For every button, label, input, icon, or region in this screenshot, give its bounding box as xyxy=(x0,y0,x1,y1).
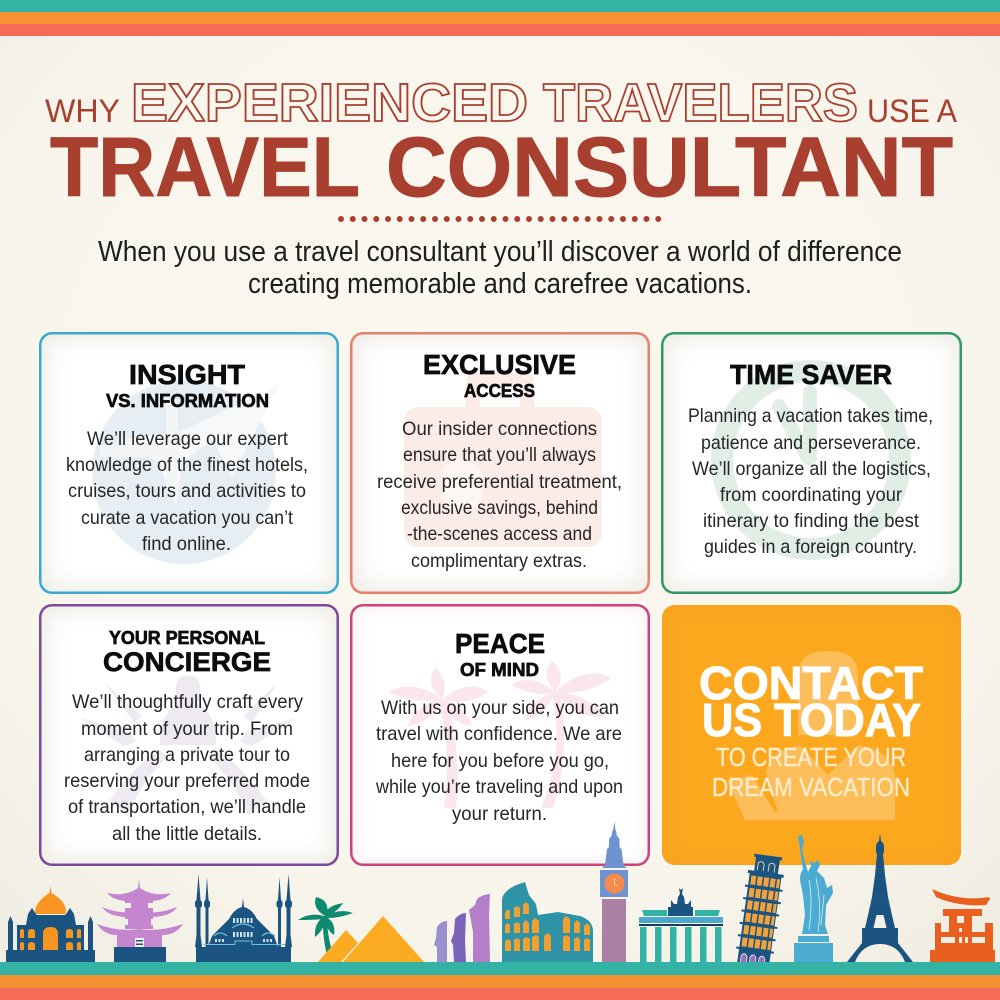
heading: YOUR PERSONAL xyxy=(109,628,265,648)
icon: globe and plane watermark xyxy=(92,380,280,564)
call to action heading xyxy=(699,657,923,746)
icon: torii gate xyxy=(930,889,995,962)
icon: pyramids xyxy=(318,916,424,962)
panel: personal concierge xyxy=(39,604,339,866)
body text: your return. xyxy=(452,803,547,825)
body text: receive preferential treatment, xyxy=(377,471,622,493)
body text: exclusive savings, behind xyxy=(401,497,598,519)
icon: taj mahal xyxy=(6,886,95,962)
heading xyxy=(103,628,271,677)
body text: Planning a vacation takes time, xyxy=(688,405,933,427)
top stripes xyxy=(0,0,1000,36)
intro text: When you use a travel consultant you’ll discover a world of difference xyxy=(98,236,902,268)
intro text: creating memorable and carefree vacations. xyxy=(248,268,752,300)
body text: from coordinating your xyxy=(720,484,902,506)
heading: OF MIND xyxy=(460,660,539,680)
heading: INSIGHT xyxy=(129,359,245,390)
body text: moment of your trip. From xyxy=(81,718,293,740)
body text: guides in a foreign country. xyxy=(704,536,917,558)
title: WHY xyxy=(45,93,120,129)
icon: colosseum xyxy=(502,882,593,962)
icon: palm tree xyxy=(298,897,353,962)
icon: service bell watermark xyxy=(80,676,296,816)
body text xyxy=(64,691,310,845)
icon: pagoda xyxy=(97,879,183,962)
body text: knowledge of the finest hotels, xyxy=(66,454,308,476)
title: EXPERIENCED xyxy=(131,74,528,133)
icon: suitcase watermark xyxy=(404,373,602,547)
body text: cruises, tours and activities to xyxy=(68,480,306,502)
heading: CONCIERGE xyxy=(103,647,271,677)
body text: With us on your side, you can xyxy=(381,697,619,719)
title: CONSULTANT xyxy=(386,120,953,214)
body text xyxy=(688,405,933,558)
body text xyxy=(66,428,308,555)
body text: -the-scenes access and xyxy=(407,523,592,545)
heading: PEACE xyxy=(455,628,545,659)
intro text xyxy=(98,236,902,300)
body text xyxy=(377,418,622,572)
body text: travel with confidence. We are xyxy=(376,723,622,745)
title xyxy=(45,74,958,214)
heading: ACCESS xyxy=(464,381,535,401)
body text: patience and perseverance. xyxy=(701,432,921,454)
body text: We’ll thoughtfully craft every xyxy=(72,691,303,713)
icon: traveler watermark xyxy=(727,651,895,820)
title: TRAVEL xyxy=(50,120,360,214)
heading: TIME SAVER xyxy=(730,359,892,390)
panel: peace of mind xyxy=(350,604,650,866)
icon: statue of liberty xyxy=(794,835,833,962)
call to action subheading: DREAM VACATION xyxy=(712,772,910,802)
call to action subheading xyxy=(712,742,910,802)
bottom stripes xyxy=(0,962,1000,1000)
panel: insight xyxy=(39,332,339,594)
body text: We’ll organize all the logistics, xyxy=(692,458,931,480)
call to action heading: CONTACT xyxy=(699,657,923,709)
call to action heading: US TODAY xyxy=(702,694,921,746)
dotted divider xyxy=(338,216,662,222)
icon: eiffel tower xyxy=(847,833,913,962)
title: USE A xyxy=(867,93,958,129)
icon: palm trees watermark xyxy=(388,661,612,808)
icon: brandenburg gate xyxy=(639,888,723,962)
icon: big ben xyxy=(600,822,628,962)
body text: while you’re traveling and upon xyxy=(375,776,623,798)
body text: all the little details. xyxy=(112,823,262,845)
body text: here for you before you go, xyxy=(391,750,609,772)
panel: time saver xyxy=(661,332,962,594)
body text xyxy=(375,697,623,825)
heading: VS. INFORMATION xyxy=(106,391,269,411)
panel: contact us xyxy=(662,605,961,865)
icon: leaning tower of pisa xyxy=(733,853,787,975)
heading: EXCLUSIVE xyxy=(423,349,576,380)
heading xyxy=(423,349,576,401)
icon: blue mosque xyxy=(195,874,292,962)
body text: ensure that you’ll always xyxy=(403,444,596,466)
title: TRAVELERS xyxy=(543,74,858,133)
call to action subheading: TO CREATE YOUR xyxy=(716,742,906,772)
body text: Our insider connections xyxy=(402,418,597,440)
body text: We’ll leverage our expert xyxy=(87,428,289,450)
body text: itinerary to finding the best xyxy=(703,510,920,532)
heading xyxy=(455,628,545,680)
panel: exclusive access xyxy=(350,332,650,594)
body text: of transportation, we’ll handle xyxy=(68,796,306,818)
body text: reserving your preferred mode xyxy=(64,770,310,792)
body text: complimentary extras. xyxy=(411,550,587,572)
heading xyxy=(106,359,269,411)
body text: find online. xyxy=(142,533,231,555)
body text: arranging a private tour to xyxy=(84,744,290,766)
icon: clock watermark xyxy=(722,371,900,549)
body text: curate a vacation you can’t xyxy=(81,507,294,529)
icon: moai statues xyxy=(434,894,490,962)
